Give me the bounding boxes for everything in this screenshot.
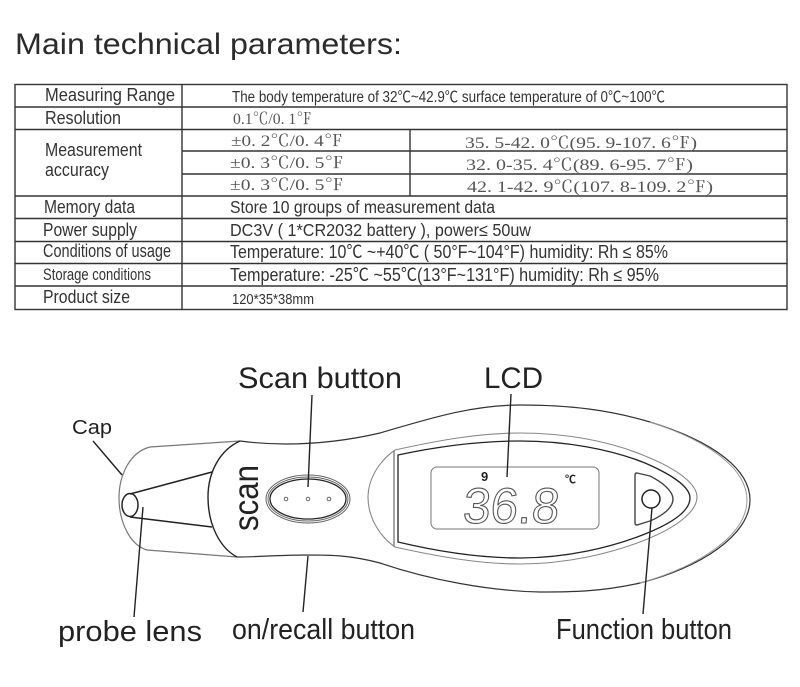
row: storage conditions: Storage conditions	[43, 265, 151, 284]
callout: on/recall button: on/recall button	[232, 614, 415, 646]
diagram: thermometer	[119, 405, 750, 592]
table: technical parameters	[15, 84, 787, 310]
row: resolution: 0.1℃/0. 1℉	[233, 111, 312, 128]
callout: on/recall button	[232, 556, 415, 646]
row: conditions of usage: Temperature: 10℃ ~+40℃ ( 50°F~104°F) humidity: Rh ≤ 85%	[230, 242, 668, 262]
row: measurement accuracy: ±0. 2℃/0. 4℉	[231, 133, 343, 150]
row: product size: 120*35*38mm	[232, 292, 314, 308]
callout: cap: Cap	[72, 417, 112, 439]
row: power supply: DC3V ( 1*CR2032 battery ), power≤ 50uw	[230, 220, 531, 240]
probe lens	[122, 472, 212, 527]
row: measurement accuracy: 32. 0-35. 4℃(89. 6-95. 7℉)	[466, 157, 693, 174]
row: measurement accuracy: accuracy	[45, 160, 109, 180]
device body outline	[237, 405, 750, 592]
callout: scan button: Scan button	[238, 362, 402, 395]
callout: function button: Function button	[556, 614, 732, 646]
row: power supply	[43, 220, 531, 240]
LCD screen	[431, 467, 599, 534]
LCD screen: 36.8	[461, 478, 562, 534]
row: resolution: Resolution	[45, 108, 121, 128]
title: Main technical parameters:	[15, 28, 402, 61]
row: measurement accuracy: ±0. 3℃/0. 5℉	[230, 177, 344, 194]
callout: cap	[72, 417, 122, 475]
row: resolution	[45, 108, 312, 128]
display window	[368, 433, 697, 564]
row: measurement accuracy	[45, 133, 713, 196]
row: measurement accuracy: Measurement	[45, 140, 142, 160]
row: product size: Product size	[43, 287, 130, 307]
row: memory data	[44, 197, 495, 217]
callout: function button	[556, 508, 732, 646]
cap	[119, 441, 240, 557]
scan button	[266, 475, 350, 523]
row: measurement accuracy: 42. 1-42. 9℃(107. 8-109. 2℉)	[467, 179, 713, 196]
LCD screen: 9	[481, 469, 488, 484]
row: measuring range: Measuring Range	[45, 85, 175, 105]
row: conditions of usage	[43, 241, 668, 262]
row: measuring range: The body temperature of 32℃~42.9℃ surface temperature of 0℃~100℃	[232, 89, 665, 106]
row: storage conditions	[43, 265, 659, 285]
row: measurement accuracy: 35. 5-42. 0℃(95. 9-107. 6℉)	[465, 135, 697, 152]
row: memory data: Memory data	[44, 197, 136, 217]
row: conditions of usage: Conditions of usage	[43, 241, 171, 261]
callout: scan button	[238, 362, 402, 487]
row: measurement accuracy: ±0. 3℃/0. 5℉	[230, 155, 344, 172]
LCD screen: ℃	[565, 474, 576, 486]
row: measuring range	[45, 85, 665, 106]
row: memory data: Store 10 groups of measurement data	[230, 197, 495, 217]
scan label on body: scan	[227, 465, 266, 531]
function button	[635, 473, 673, 525]
row: storage conditions: Temperature: -25℃ ~55℃(13°F~131°F) humidity: Rh ≤ 95%	[230, 265, 659, 285]
row: product size	[43, 287, 314, 308]
callout: LCD	[484, 362, 543, 477]
callout: LCD: LCD	[484, 362, 543, 395]
callout: probe lens: probe lens	[58, 616, 202, 648]
row: power supply: Power supply	[43, 220, 137, 240]
callout: probe lens	[58, 507, 202, 648]
